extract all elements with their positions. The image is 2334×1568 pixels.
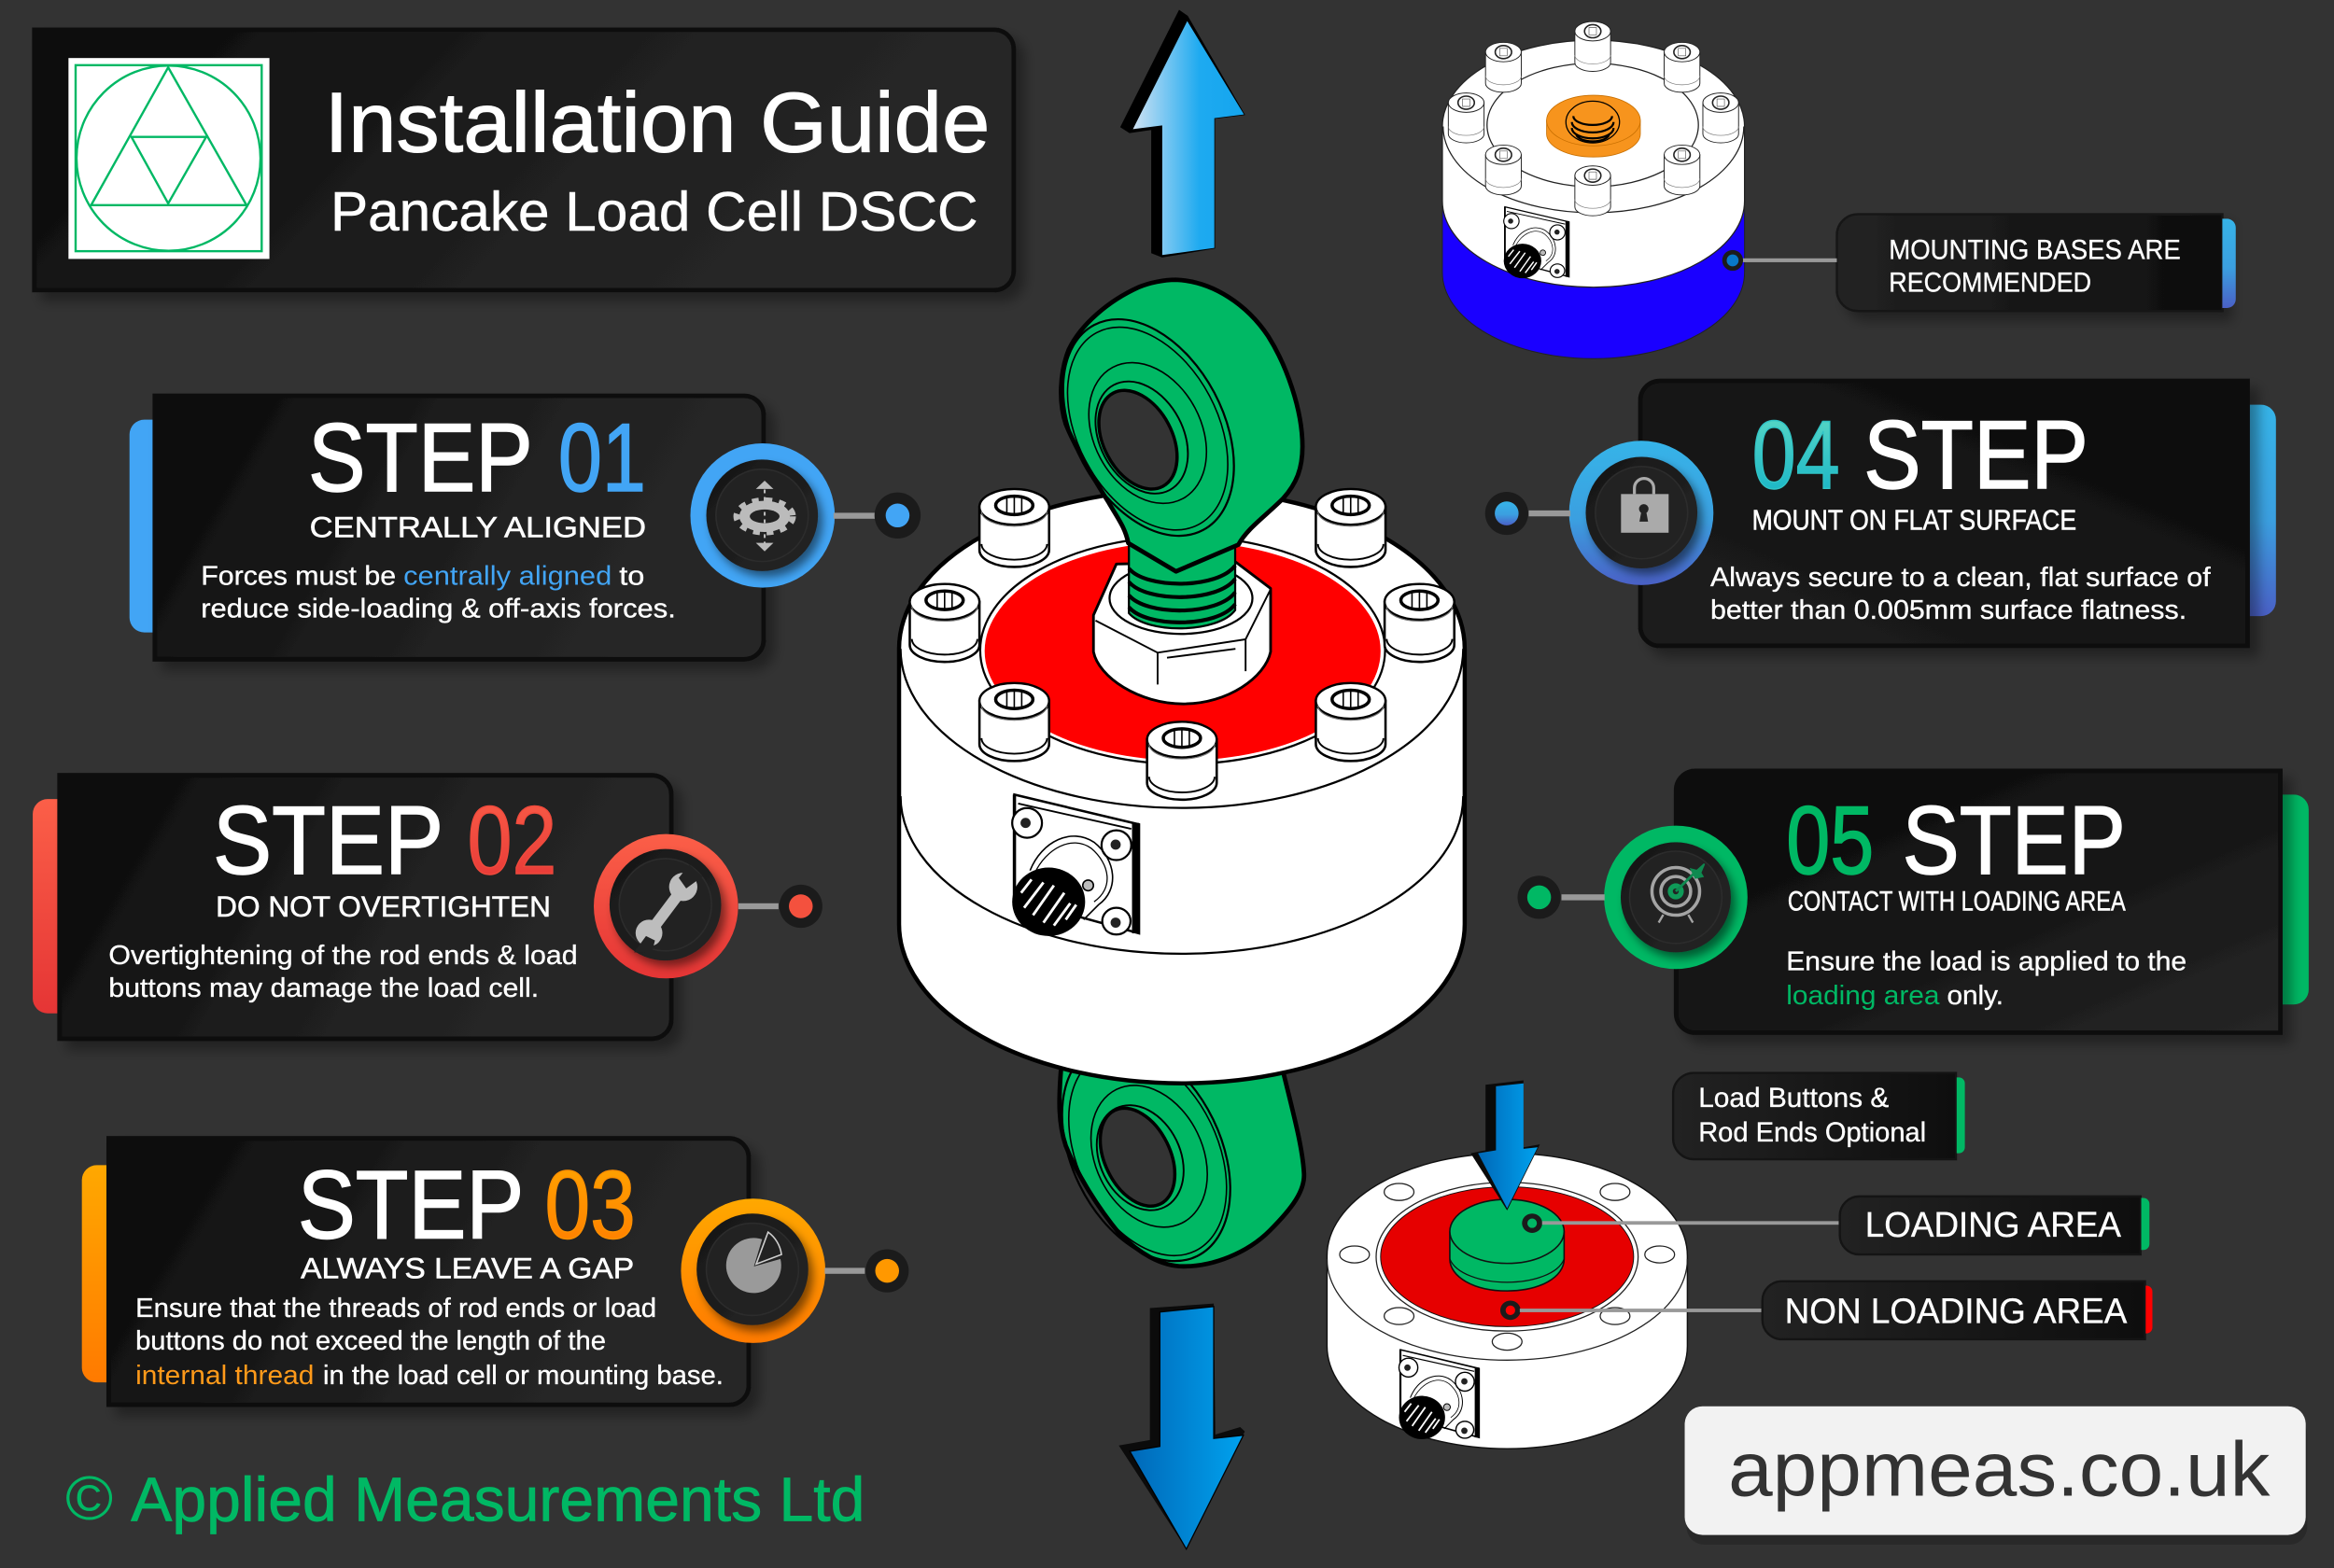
icon: gap pie: [681, 1198, 825, 1343]
step 03 heading: STEP: [298, 1151, 524, 1259]
connector line and dot: [834, 493, 921, 539]
logo: [68, 58, 270, 259]
title text: Installation Guide: [325, 77, 990, 171]
copyright: ©: [65, 1463, 113, 1533]
small screws: [1448, 21, 1738, 216]
hex nut: [1093, 562, 1271, 704]
step 04 body: Always secure to a clean, flat surface of: [1710, 563, 2212, 593]
step 02 body: [108, 941, 578, 1003]
step 01 heading: STEP: [308, 403, 533, 511]
step 02 body: buttons may damage the load cell.: [108, 973, 539, 1003]
panel: step 01: [130, 396, 921, 659]
main load cell: [899, 280, 1465, 1084]
callout: non loading area: NON LOADING AREA: [1785, 1291, 2128, 1331]
step 03 body: [135, 1294, 724, 1391]
step 03 subheading: ALWAYS LEAVE A GAP: [301, 1253, 634, 1285]
cell body: [899, 490, 1465, 1084]
panel: step 04: [1485, 381, 2276, 646]
icon: wrench: [594, 834, 738, 978]
callout: loading area: LOADING AREA: [1865, 1205, 2121, 1245]
rod end: lower eye: [1029, 1015, 1304, 1289]
step 02 heading: 02: [468, 786, 556, 894]
connector line and dot: [738, 885, 823, 928]
callout: load buttons optional: Rod Ends Optional: [1698, 1117, 1926, 1148]
step 03 body: internal thread: [135, 1361, 314, 1391]
cell body: [1327, 1154, 1687, 1449]
step 01 body: Forces must be: [201, 562, 396, 592]
step 05 body: [1786, 947, 2186, 1011]
connector: [1504, 207, 1569, 278]
loading area dot: [1522, 1213, 1542, 1233]
connector line and dot: [1485, 492, 1570, 535]
panel: step 05: [1517, 771, 2309, 1033]
callout: load buttons optional: [1673, 1073, 1965, 1159]
orange thread boss: [1547, 95, 1640, 157]
step 05 heading: STEP: [1903, 786, 2126, 894]
step 01 body: [201, 562, 676, 624]
mounting base illustration: [1442, 21, 1745, 358]
step 05 subheading: CONTACT WITH LOADING AREA: [1788, 887, 2126, 917]
load button illustration: [1327, 1081, 1687, 1449]
callout: load buttons optional: Load Buttons &: [1698, 1083, 1890, 1113]
step 03 body: buttons do not exceed the length of the: [135, 1326, 606, 1356]
website badge: appmeas.co.uk: [1728, 1425, 2271, 1512]
callout: loading area: [1542, 1197, 2149, 1254]
step 05 body: Ensure the load is applied to the: [1786, 947, 2186, 977]
step 01 heading: 01: [558, 403, 646, 511]
step 05 heading: 05: [1786, 786, 1874, 894]
step 04 heading: [1752, 400, 2088, 509]
connector: [1399, 1350, 1479, 1439]
step 01 subheading: CENTRALLY ALIGNED: [310, 511, 646, 544]
arrow: pull down: [1118, 1304, 1244, 1549]
step 03 heading: 03: [545, 1151, 636, 1259]
non-loading red area: [980, 537, 1385, 764]
arrow: pull up: [1121, 11, 1244, 257]
website badge: [1685, 1407, 2307, 1545]
callout: mounting bases: [1722, 215, 2236, 311]
icon: padlock: [1569, 441, 1713, 585]
step 04 body: better than 0.005mm surface flatness.: [1710, 595, 2186, 625]
icon: target: [1604, 826, 1748, 969]
step 03 body: Ensure that the threads of rod ends or load: [135, 1294, 656, 1323]
red non-loading area: [1376, 1183, 1638, 1331]
step 02 heading: STEP: [213, 786, 443, 894]
panel: title: [35, 30, 1014, 290]
green load button: [1450, 1232, 1564, 1291]
connector line and dot: [824, 1249, 908, 1293]
white cell body: [1442, 40, 1745, 287]
step 02 subheading: DO NOT OVERTIGHTEN: [216, 890, 551, 923]
step 04 body: [1710, 563, 2212, 625]
subtitle text: Pancake Load Cell DSCC: [330, 181, 978, 243]
panel: step 03: [82, 1139, 908, 1405]
step 05 body: only.: [1947, 981, 2004, 1011]
mounting holes: [1340, 1158, 1675, 1351]
connector: [1012, 794, 1139, 936]
step 05 heading: [1786, 786, 2126, 894]
threaded stud: [1129, 545, 1235, 628]
step 01 body: centrally aligned: [403, 562, 612, 592]
connector line and dot: [1517, 875, 1605, 919]
step 04 heading: 04: [1752, 400, 1840, 509]
callout: mounting bases: MOUNTING BASES ARE: [1889, 234, 2181, 265]
step 01 body: to: [619, 562, 644, 592]
rod end: upper eye: [1028, 280, 1302, 571]
callout: mounting bases: RECOMMENDED: [1889, 267, 2091, 298]
step 01 body: reduce side-loading & off-axis forces.: [201, 595, 676, 624]
icon: centring gear: [690, 443, 835, 588]
step 04 heading: STEP: [1863, 400, 2088, 509]
blue mounting base: [1442, 201, 1745, 358]
copyright: Applied Measurements Ltd: [131, 1464, 865, 1534]
non loading area dot: [1500, 1300, 1521, 1320]
step 04 subheading: MOUNT ON FLAT SURFACE: [1752, 506, 2076, 537]
load arrow: [1470, 1081, 1540, 1211]
step 05 body: loading area: [1786, 981, 1940, 1011]
step 03 body: in the load cell or mounting base.: [323, 1361, 724, 1391]
socket head screws: [909, 489, 1455, 800]
step 02 body: Overtightening of the rod ends & load: [108, 941, 578, 971]
callout: non loading area: [1520, 1281, 2152, 1339]
panel: step 02: [33, 776, 823, 1039]
